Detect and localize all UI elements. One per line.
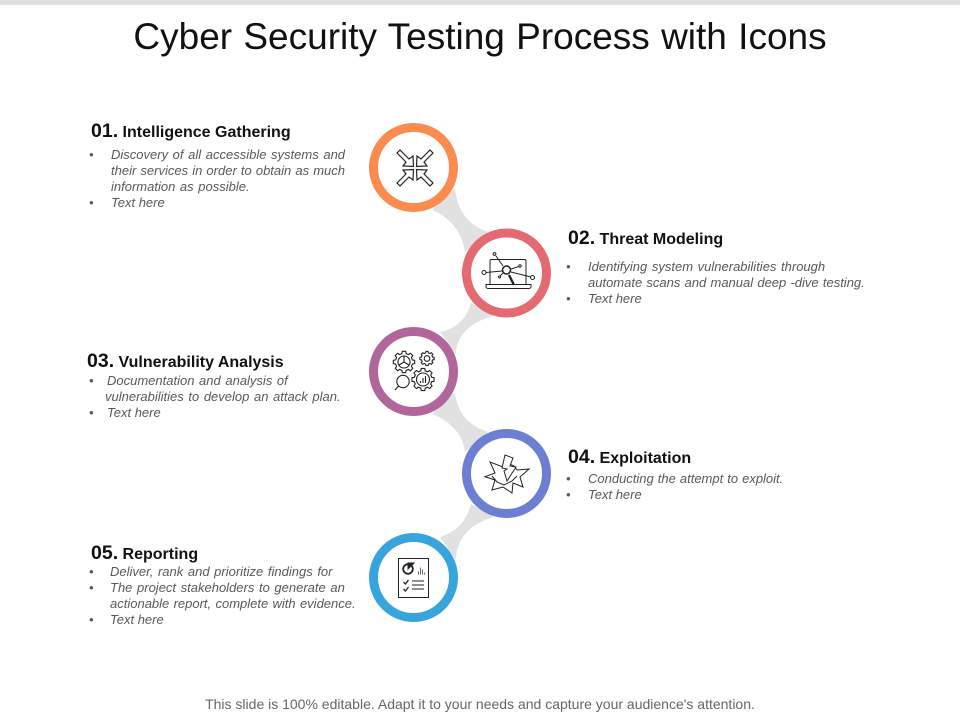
body 02: Identifying system vulnerabilities through [588, 259, 825, 274]
body 02: • [566, 291, 571, 306]
title: Cyber Security Testing Process with Icons [133, 16, 827, 57]
body 02 [566, 259, 865, 306]
body 01: Text here [111, 195, 165, 210]
connectors [432, 188, 494, 560]
body 05 [89, 564, 356, 627]
footer note: This slide is 100% editable. Adapt it to your needs and capture your audience's attention. [205, 696, 755, 712]
body 03: • [89, 405, 94, 420]
body 04 [566, 471, 783, 502]
body 04: • [566, 471, 571, 486]
text block 02 [566, 227, 865, 306]
heading 03: 03. Vulnerability Analysis [87, 350, 284, 372]
body 04: • [566, 487, 571, 502]
body 05: Deliver, rank and prioritize findings for [110, 564, 332, 579]
heading 02: 02. Threat Modeling [568, 227, 723, 249]
node 4: blue ring with explosion icon [466, 434, 546, 514]
top bar [0, 0, 960, 5]
text block 03 [87, 350, 341, 420]
body 05: The project stakeholders to generate an [110, 580, 345, 595]
body 01: their services in order to obtain as much [111, 163, 345, 178]
body 03: Documentation and analysis of [107, 373, 288, 388]
body 03: Text here [107, 405, 161, 420]
body 02: Text here [588, 291, 642, 306]
text block 04 [566, 446, 783, 502]
body 02: • [566, 259, 571, 274]
node 3: purple ring with gears icon [374, 332, 454, 412]
body 01 [89, 147, 346, 210]
node 5: sky blue ring with report icon [374, 538, 454, 618]
heading 04: 04. Exploitation [568, 446, 691, 468]
node 1: orange ring with arrows icon [374, 128, 454, 208]
body 04: Text here [588, 487, 642, 502]
heading 01: 01. Intelligence Gathering [91, 120, 291, 142]
body 05: • [89, 564, 94, 579]
body 05: • [89, 612, 94, 627]
heading 05: 05. Reporting [91, 542, 198, 564]
text block 05 [89, 542, 356, 627]
body 04: Conducting the attempt to exploit. [588, 471, 783, 486]
body 02: automate scans and manual deep -dive testing. [588, 275, 865, 290]
body 03 [89, 373, 341, 420]
body 05: actionable report, complete with evidence. [110, 596, 356, 611]
body 03: vulnerabilities to develop an attack plan. [105, 389, 341, 404]
body 03: • [89, 373, 94, 388]
body 01: Discovery of all accessible systems and [111, 147, 345, 162]
body 05: Text here [110, 612, 164, 627]
body 05: • [89, 580, 94, 595]
body 01: • [89, 195, 94, 210]
body 01: • [89, 147, 94, 162]
body 01: information as possible. [111, 179, 250, 194]
text block 01 [89, 120, 346, 210]
node 2: red ring with laptop icon [466, 233, 546, 313]
